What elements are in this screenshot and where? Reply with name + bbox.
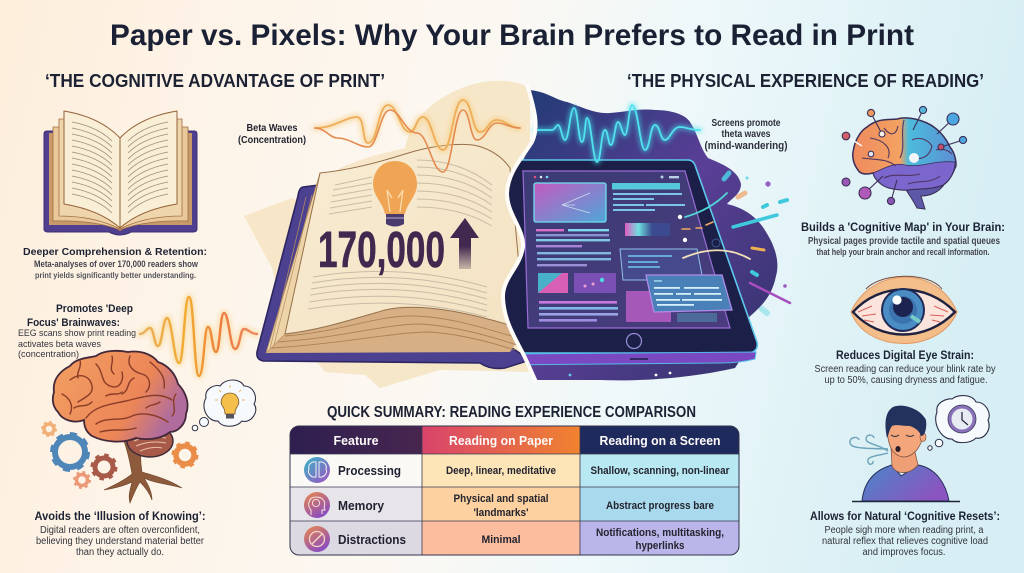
illustration: tablet [500,160,757,365]
text block: deeper comprehension: print yields significantly better understanding. [35,270,196,280]
text block: cognitive resets: Allows for Natural ‘Cognitive Resets’: [810,509,1000,523]
text block: deep focus brainwaves [18,303,136,360]
label: beta waves: (Concentration) [238,134,306,146]
table: reading experience comparison: Reading on Paper [449,434,553,448]
text block: illusion of knowing: than they actually do. [76,547,164,558]
icon: thought bubble with light bulb [192,380,256,431]
table: reading experience comparison: hyperlinks [636,540,684,552]
label: beta waves: Beta Waves [246,122,298,134]
table: reading experience comparison: Deep, linear, meditative [446,465,556,477]
table: reading experience comparison: Shallow, scanning, non-linear [590,465,730,477]
text block: illusion of knowing: believing they understand material better [36,536,205,547]
table: reading experience comparison: Processing [338,463,401,478]
chart: theta wave [535,105,700,162]
icon: sighing person [850,406,960,502]
text block: illusion of knowing: Avoids the ‘Illusion of Knowing’: [34,509,206,523]
text block: deep focus brainwaves: Focus' Brainwaves: [27,317,120,329]
label: theta waves: theta waves [722,129,771,140]
label: theta waves: (mind-wandering) [704,140,788,152]
heading: physical experience of reading: ‘THE PHYSICAL EXPERIENCE OF READING’ [627,71,984,91]
chart: beta waves over book [315,100,520,172]
illustration: open printed book [257,144,530,368]
table: reading experience comparison [290,426,739,555]
title: Paper vs. Pixels: Why Your Brain Prefers to Read in Print [110,19,914,52]
text block: deep focus brainwaves: activates beta waves [18,339,101,350]
particles: digital sparks [569,173,790,376]
icon: distractions [304,526,330,552]
label: beta waves [238,122,306,146]
statistic: 170,000: 170,000 [318,221,445,278]
table: reading experience comparison: Reading on a Screen [600,434,720,448]
illustration: torn paper backdrop [244,81,530,388]
text block: deeper comprehension: Deeper Comprehension & Retention: [23,246,207,258]
icon: gears [42,422,197,488]
label: theta waves: Screens promote [712,118,781,129]
icon: memory [304,492,330,518]
illustration: digital splash blob [503,90,777,380]
text block: cognitive map [801,222,1005,257]
decoration: white torn edge [503,84,536,382]
table: reading experience comparison: Abstract progress bare [606,500,714,512]
icon: thought bubble with clock [928,396,989,450]
table: reading experience comparison: Minimal [482,534,520,546]
text block: eye strain [814,348,996,386]
arrow: up [450,218,479,269]
icon: processing [304,457,330,483]
heading: quick summary: QUICK SUMMARY: READING EXPERIENCE COMPARISON [327,404,696,421]
icon: strained eye [851,276,957,344]
table: reading experience comparison: 'landmarks' [474,507,529,519]
table: reading experience comparison: Memory [338,498,385,513]
table: reading experience comparison: Feature [334,434,379,448]
label: theta waves [704,118,788,152]
icon: light bulb on book [373,161,417,226]
text block: cognitive resets: People sigh more when reading print, a [824,525,984,536]
icon: cognitive map brain [842,106,967,209]
text block: eye strain: Reduces Digital Eye Strain: [836,348,974,362]
table: reading experience comparison: Notifications, multitasking, [596,527,724,539]
text block: illusion of knowing [34,509,206,558]
table: reading experience comparison: Physical and spatial [454,493,548,505]
icon: brain with roots [53,351,188,503]
table: reading experience comparison: Distractions [338,532,406,547]
text block: eye strain: up to 50%, causing dryness and fatigue. [824,375,988,386]
text block: deep focus brainwaves: (concentration) [18,349,79,360]
text block: cognitive resets: natural reflex that relieves cognitive load [822,536,988,547]
icon: open book [44,111,197,235]
text block: cognitive resets: and improves focus. [862,547,946,558]
text block: illusion of knowing: Digital readers are often overconfident, [40,525,200,536]
text block: deeper comprehension: Meta-analyses of over 170,000 readers show [34,259,198,270]
chart: beta brainwave [140,297,257,376]
text block: cognitive resets [810,509,1000,558]
text block: deeper comprehension [23,246,207,280]
text block: deep focus brainwaves: Promotes 'Deep [56,303,133,315]
text block: deep focus brainwaves: EEG scans show print reading [18,328,136,339]
heading: cognitive advantage of print: ‘THE COGNITIVE ADVANTAGE OF PRINT’ [45,71,385,91]
text block: cognitive map: Builds a 'Cognitive Map' in Your Brain: [801,222,1005,234]
text block: eye strain: Screen reading can reduce your blink rate by [814,364,996,375]
